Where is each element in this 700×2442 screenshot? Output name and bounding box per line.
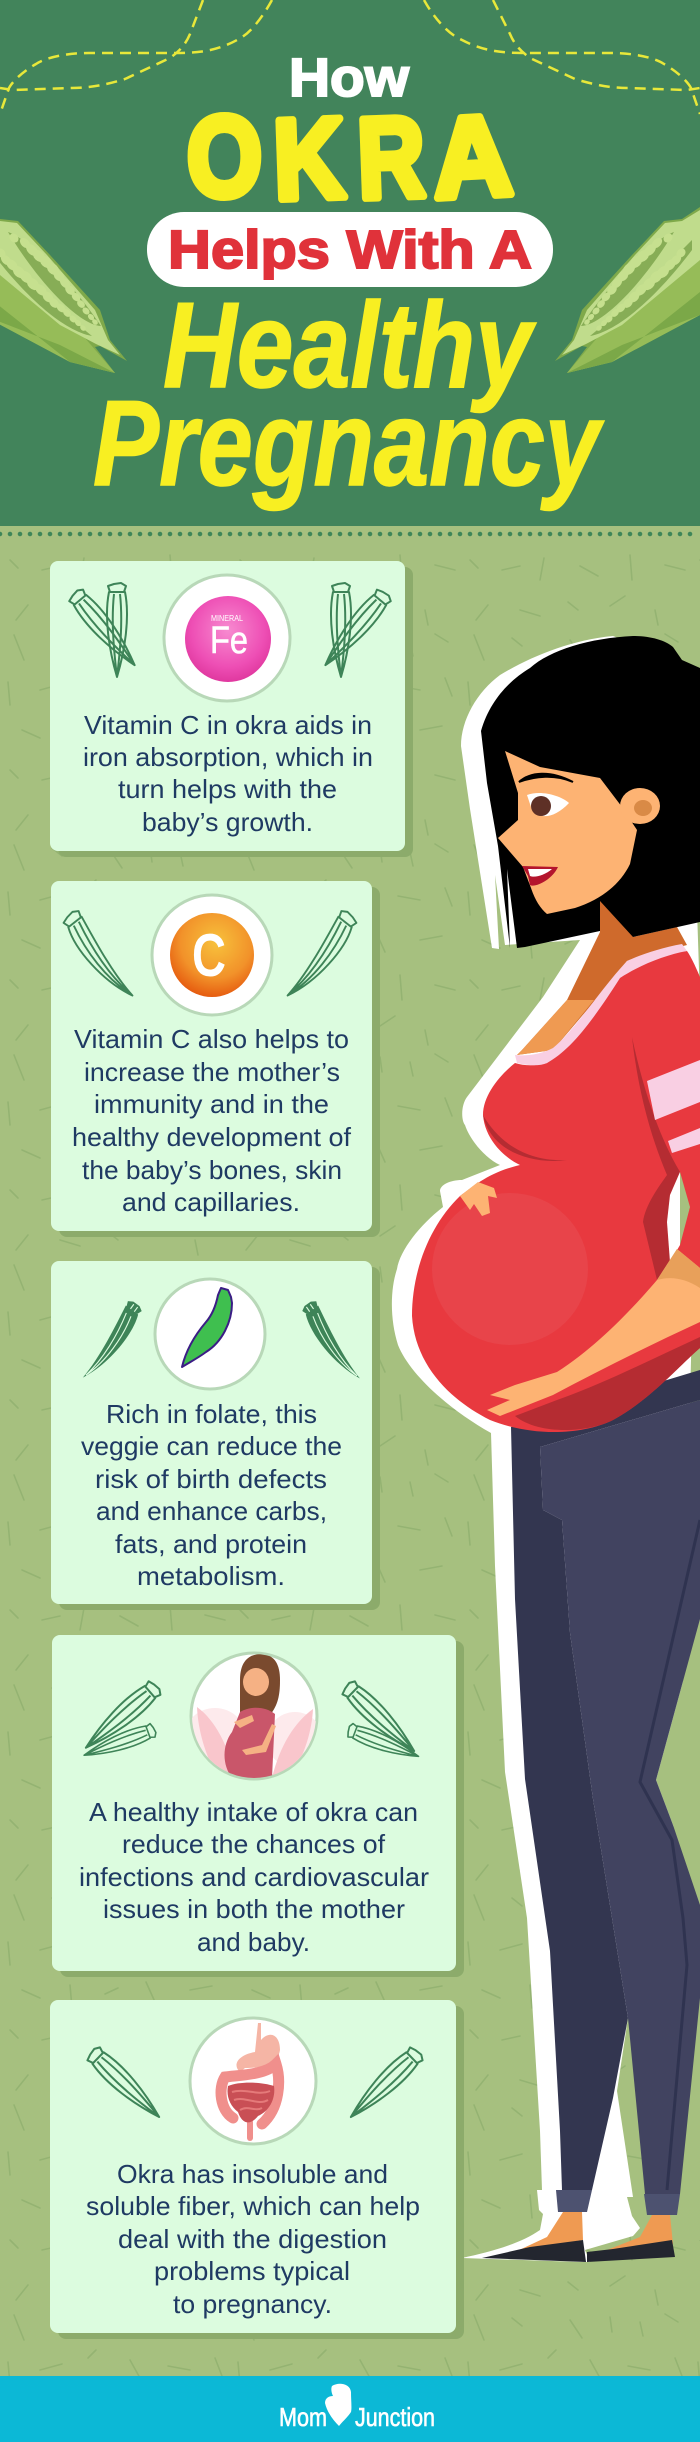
icon: vitamin C ball (152, 895, 272, 1015)
green gap right of knee (656, 1619, 700, 1905)
icon: okra right (280, 909, 361, 1004)
text: folate: veggie can reduce the (81, 1431, 342, 1461)
text: vitamin C: immunity and in the (94, 1089, 329, 1119)
trouser seam (640, 1520, 700, 2190)
title line: Pregnancy: Pregnancy (93, 375, 604, 511)
title line: OKRA: K (271, 95, 347, 224)
icon: filled okra right (298, 1299, 367, 1385)
text: digestion: Okra has insoluble and (117, 2159, 388, 2189)
belly highlight (432, 1193, 588, 1345)
text: infections (79, 1797, 429, 1957)
panel: digestion (50, 2000, 464, 2339)
text: vitamin C: healthy development of (72, 1122, 352, 1152)
text: infections: A healthy intake of okra can (89, 1797, 418, 1827)
pill: Helps With A: Helps With A (168, 220, 532, 280)
text: folate: and enhance carbs, (96, 1496, 327, 1526)
panel: iron absorption (50, 561, 413, 857)
text: digestion (86, 2159, 420, 2319)
text: infections: reduce the chances of (122, 1829, 386, 1859)
panel: infections (52, 1635, 464, 1977)
title line: How: How (289, 48, 410, 108)
title line: OKRA: A (430, 92, 515, 223)
sleeve stripes (647, 1060, 700, 1153)
gap behind arm (667, 1172, 680, 1262)
icon: okra pair left (79, 1679, 163, 1763)
shirt lower shadow (515, 1337, 700, 1430)
bust shadow (483, 1115, 567, 1161)
pill: Helps With A (147, 212, 553, 287)
upper hand (460, 1182, 497, 1216)
back leg (511, 1370, 700, 2190)
icon: pregnant mother in circle (183, 1653, 323, 1779)
text: digestion: soluble fiber, which can help (86, 2191, 420, 2221)
logo: MomJunction: Mom (279, 2402, 327, 2432)
text: vitamin C: increase the mother’s (84, 1057, 340, 1087)
eye (527, 793, 569, 816)
pregnant woman illustration (392, 636, 700, 2262)
icon: green okra in circle (155, 1279, 265, 1389)
feet (517, 2212, 673, 2251)
icon: okra pair left (67, 583, 142, 677)
text: folate: metabolism. (137, 1561, 285, 1591)
hair (481, 636, 700, 948)
icon: okra pair right (340, 1679, 421, 1764)
panel: vitamin C (51, 881, 380, 1237)
lips (522, 866, 558, 886)
arm shadow (632, 1037, 680, 1280)
logo: MomJunction: Junction (355, 2402, 435, 2432)
text: folate: fats, and protein (115, 1529, 307, 1559)
text: folate: Rich in folate, this (106, 1399, 317, 1429)
icon: right header okra (555, 207, 700, 373)
title line: OKRA: O (187, 94, 262, 221)
icon: vitamin C ball: C (192, 922, 226, 989)
text: iron absorption: turn helps with the (118, 774, 337, 804)
forearm and lower hand (487, 1249, 700, 1416)
stitched dots row (0, 532, 700, 536)
panel: folate (51, 1261, 380, 1610)
text: folate (81, 1399, 342, 1591)
text: iron absorption: Vitamin C in okra aids in (84, 710, 372, 740)
icon: okra pair right (318, 583, 393, 677)
neckline trim (515, 944, 687, 1065)
face (498, 751, 637, 914)
text: infections: and baby. (197, 1927, 310, 1957)
icon: filled okra left (76, 1299, 146, 1385)
text: infections: issues in both the mother (103, 1894, 405, 1924)
front leg (540, 1400, 700, 2194)
text: iron absorption: iron absorption, which in (83, 742, 373, 772)
text: iron absorption (83, 710, 373, 837)
eyebrow (519, 774, 573, 782)
icon: iron mineral ball: MINERAL (211, 614, 243, 623)
shirt (412, 951, 700, 1432)
icon: okra right (344, 2045, 425, 2124)
ear (620, 788, 660, 824)
title line: OKRA: R (355, 94, 427, 223)
text: vitamin C: Vitamin C also helps to (74, 1024, 349, 1054)
text: vitamin C: and capillaries. (122, 1187, 300, 1217)
title line: Healthy: Healthy (163, 277, 536, 413)
white cut-out outline (392, 636, 700, 2262)
footer bar (0, 2376, 700, 2442)
text: vitamin C (72, 1024, 352, 1217)
decorative dashed curves (0, 0, 700, 114)
title (93, 48, 604, 511)
trouser cuffs (556, 2190, 680, 2215)
shoes (482, 2240, 675, 2262)
logo: MomJunction (279, 2384, 435, 2432)
header panel (0, 0, 700, 534)
text: digestion: to pregnancy. (173, 2289, 332, 2319)
icon: okra left (85, 2045, 166, 2124)
icon: left header okra (0, 207, 127, 373)
icon: iron mineral ball (164, 575, 290, 701)
text: infections: infections and cardiovascular (79, 1862, 429, 1892)
text: folate: risk of birth defects (95, 1464, 327, 1494)
icon: iron mineral ball: Fe (210, 620, 248, 662)
text: iron absorption: baby’s growth. (142, 807, 313, 837)
icon: digestive system in circle (190, 2018, 316, 2144)
icon: okra left (59, 909, 140, 1004)
text: digestion: problems typical (154, 2256, 350, 2286)
text: vitamin C: the baby’s bones, skin (82, 1155, 342, 1185)
neck and chest (517, 830, 687, 1055)
text: digestion: deal with the digestion (118, 2224, 387, 2254)
title line: OKRA (187, 92, 515, 224)
